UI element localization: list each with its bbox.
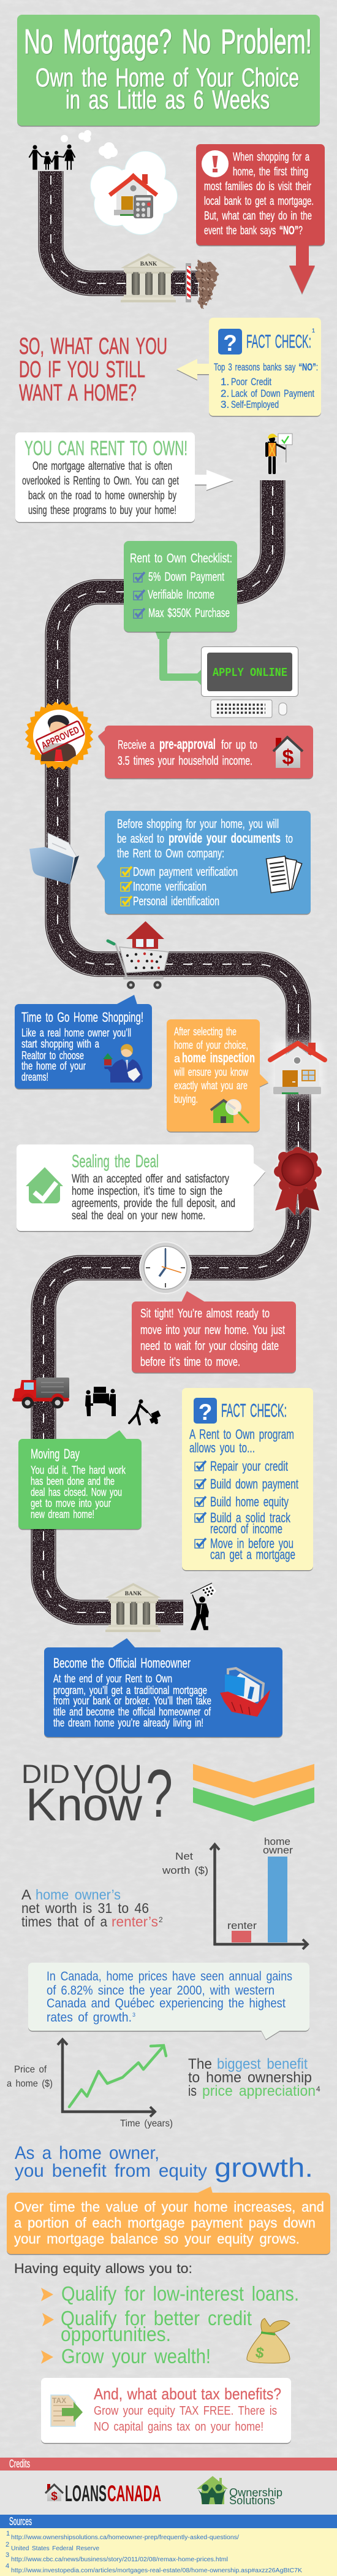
icon: house with dollar [273, 737, 303, 769]
net worth comparison text: home owner’s [36, 1887, 121, 1903]
icon: bank: BANK [140, 261, 157, 267]
text [118, 736, 257, 768]
reasons list: 2. [221, 388, 229, 399]
text block [204, 151, 314, 237]
reasons list: Poor Credit [231, 376, 271, 388]
checklist items: 5% Down Payment [148, 570, 224, 584]
line chart: price of a home over time: Price of [14, 2064, 47, 2075]
benefits list: Build down payment [210, 1476, 298, 1492]
body text: program, you’ll get a traditional mortgage [53, 1684, 207, 1696]
text: home of your choice, [174, 1039, 248, 1051]
icon: rubble [196, 260, 218, 309]
source links: http://www.cbc.ca/news/business/story/2011/02/08/remax-home-prices.html [11, 2556, 228, 2563]
text [47, 1969, 292, 2025]
price appreciation text: price appreciation [202, 2083, 316, 2099]
benefits list: Move in before you [210, 1536, 293, 1551]
benefits list: Build home equity [210, 1494, 289, 1509]
heading: Time to Go Home Shopping! [21, 1010, 143, 1025]
text: Sit tight! You’re almost ready to [140, 1307, 270, 1321]
bar chart: net worth [162, 1836, 308, 1949]
body text: back on the road to home ownership by [28, 489, 176, 502]
icon: question mark [194, 1398, 217, 1425]
heading: And, what about tax benefits? [94, 2385, 281, 2403]
body text: NO capital gains tax on your home! [94, 2420, 263, 2434]
house [110, 173, 157, 216]
text: move into your new home. You just [140, 1324, 285, 1337]
icon: house with magnifier [211, 1100, 248, 1123]
checklist items: Max $350K Purchase [148, 607, 230, 620]
intro: allows you to... [189, 1440, 255, 1455]
text: exactly what you are [174, 1079, 248, 1092]
bar chart: net worth: renter [227, 1920, 257, 1931]
icon: realtor [103, 1044, 143, 1083]
text: the Rent to Own company: [117, 847, 224, 861]
text block: event the bank says “NO”? [204, 224, 303, 237]
body text: has been done and the [31, 1475, 115, 1487]
logo: loans canada: $ [51, 2490, 58, 2503]
icon: tax document: TAX [52, 2396, 66, 2405]
icon: house with check [26, 1167, 63, 1203]
panel: tax benefits [41, 2378, 291, 2443]
panel: sit tight [132, 1291, 296, 1373]
panel: rent to own checklist [124, 541, 237, 632]
net worth comparison text: times that of a [21, 1914, 107, 1930]
heading: Sealing the Deal [72, 1152, 159, 1171]
source links: http://www.investopedia.com/articles/mortgages-real-estate/08/home-ownership.asp#axzz26AgBtC7K [11, 2567, 302, 2574]
heading: equity growth: you benefit from equity [15, 2161, 207, 2181]
road: upper segment to bank [51, 171, 198, 283]
price appreciation text [188, 2056, 320, 2099]
text: Receive a [118, 738, 155, 752]
text: Personal identification [133, 895, 219, 908]
body text: agreements, provide the full deposit, and [72, 1197, 235, 1210]
body text: new dream home! [31, 1508, 94, 1520]
heading: Become the Official Homeowner [53, 1655, 191, 1671]
line chart: price of a home over time: Time (years) [120, 2118, 173, 2129]
price appreciation text: biggest benefit [217, 2056, 308, 2072]
checklist title: Rent to Own Checklist: [130, 551, 232, 565]
body text: get to move into your [31, 1497, 111, 1509]
benefits list: Build a solid track [210, 1510, 291, 1525]
price appreciation text: The [188, 2056, 212, 2072]
text [14, 2199, 324, 2247]
text: buying. [174, 1093, 198, 1105]
icon: approved badge: APPROVED [40, 725, 81, 751]
price appreciation text: 4 [316, 2085, 320, 2093]
body text: using these programs to buy your home! [28, 504, 176, 517]
body text: overlooked is Renting to Own. You can get [22, 475, 179, 488]
bullet three: Grow your wealth! [61, 2345, 211, 2367]
panel: time to go home shopping [15, 995, 152, 1089]
source links: http://www.ownershipsolutions.ca/homeowner-prep/frequently-asked-questions/ [11, 2534, 239, 2541]
body text: With an accepted offer and satisfactory [72, 1173, 229, 1186]
body text [21, 1027, 131, 1083]
icon: house destination [270, 1040, 325, 1097]
panel: you can rent to own [15, 432, 233, 522]
text [140, 1307, 285, 1369]
heading: what can you do: DO IF YOU STILL [19, 357, 145, 383]
icon: approved badge [25, 702, 93, 770]
icon: thought bubbles with house and calculator [61, 130, 177, 234]
calculator [134, 195, 153, 218]
body text: One mortgage alternative that is often [32, 460, 172, 473]
source links: 4 [6, 2563, 9, 2570]
icon: chevrons [193, 1764, 314, 1822]
panel: provide your documents [97, 811, 311, 914]
panel: pre-approval [98, 726, 313, 778]
text: Income verification [133, 880, 206, 894]
text: 3.5 times your household income. [118, 754, 252, 768]
body text [94, 2404, 277, 2434]
icon: computer apply online [201, 646, 298, 718]
icon: road barrier [186, 263, 191, 302]
benefits list: record of income [210, 1521, 282, 1536]
heading: what can you do: WANT A HOME? [19, 380, 137, 406]
logo: ownership solutions [197, 2476, 282, 2507]
text: will ensure you know [173, 1066, 249, 1078]
benefits list: can get a mortgage [210, 1547, 295, 1562]
heading: did you know: ? [146, 1756, 173, 1831]
heading: what can you do: SO, WHAT CAN YOU [19, 334, 167, 359]
icon: bank: BANK [125, 1591, 142, 1597]
credits section [0, 2458, 337, 2515]
panel: equity explanation [7, 2187, 330, 2254]
body text [53, 1673, 211, 1729]
body text: Grow your equity TAX FREE. There is [94, 2404, 277, 2418]
subheading: having equity: Having equity allows you to: [14, 2261, 192, 2276]
logo: loans canada: LOANS [65, 2481, 107, 2506]
text: home inspection [182, 1050, 255, 1065]
text: provide your documents [168, 830, 281, 846]
intro: A Rent to Own program [189, 1427, 294, 1442]
text: of 6.82% since the year 2000, with western [47, 1984, 275, 1998]
heading: did you know: Know [26, 1779, 143, 1830]
icon: question mark: ? [223, 331, 237, 356]
panel: fact check reasons [176, 318, 321, 416]
panel: when shopping for a home [196, 144, 325, 294]
fact check heading: 1 [312, 328, 315, 334]
panel: fact check rent to own benefits [182, 1388, 313, 1570]
text [173, 1025, 255, 1105]
icon: person with hand truck [129, 1400, 161, 1424]
body text: Realtor to choose [21, 1049, 84, 1062]
body text [22, 460, 179, 517]
credits section: Credits [9, 2458, 30, 2470]
icon: movers carrying boxes [85, 1387, 116, 1416]
body text: seal the deal on your new home. [72, 1209, 205, 1222]
body text: the dream home you’re already living in! [53, 1717, 203, 1729]
text: for up to [221, 738, 257, 752]
heading: equity growth: growth. [214, 2153, 313, 2183]
panel: canada home prices callout [28, 1963, 309, 2039]
equity benefit list [41, 2282, 299, 2367]
icon: money bag [247, 2318, 290, 2363]
heading: what can you do [19, 334, 167, 406]
body text: start shopping with a [21, 1038, 100, 1050]
text: your mortgage balance so your equity grows. [14, 2231, 300, 2247]
text: be asked to [117, 832, 164, 846]
line chart: price of a home over time: a home ($) [7, 2079, 53, 2089]
reasons list: 1. [221, 376, 229, 388]
bar chart: net worth: home [264, 1836, 290, 1847]
source links: United States Federal Reserve [11, 2545, 99, 2552]
icon: house in basket [220, 1668, 270, 1717]
bar chart: net worth: worth ($) [162, 1865, 208, 1876]
panel: moving day [18, 1430, 142, 1529]
icon: document folder [29, 833, 79, 884]
icon: question mark [218, 329, 242, 356]
source links: 3 [6, 2551, 9, 2559]
heading: Moving Day [31, 1446, 80, 1462]
heading: did you know [21, 1756, 173, 1831]
heading: did you know: DID [21, 1760, 70, 1789]
body text: the home of your [21, 1060, 86, 1072]
text: In Canada, home prices have seen annual gains [47, 1969, 292, 1984]
icon: person waving checkered flag [191, 1583, 216, 1630]
body text: title and become the official homeowner of [53, 1706, 211, 1718]
benefits list: Repair your credit [210, 1459, 288, 1474]
benefits list [195, 1459, 298, 1562]
source links [6, 2530, 302, 2574]
bullet two: opportunities. [61, 2323, 171, 2345]
connector: checklist to computer [155, 629, 201, 685]
text: to [286, 832, 293, 846]
fact check heading [246, 328, 315, 352]
reasons list [214, 361, 318, 410]
net worth comparison text: renter’s [112, 1914, 158, 1930]
icon: wax seal with ribbon [274, 1147, 322, 1216]
body text: from your bank or broker. You’ll then take [53, 1695, 211, 1707]
line chart: price of a home over time [7, 2039, 173, 2129]
title panel [17, 15, 320, 126]
logo: ownership solutions: Ownership [229, 2486, 282, 2499]
icon: family [29, 145, 75, 169]
text: Over time the value of your home increases, and [14, 2199, 324, 2215]
icon: money bag: $ [254, 2344, 265, 2362]
road: main winding segment [44, 480, 298, 1612]
body text: home inspection, it’s time to sign the [72, 1185, 222, 1198]
logo: loans canada: CANADA [107, 2481, 161, 2506]
checklist items: Verifiable Income [148, 588, 214, 602]
heading: equity growth: As a home owner, [15, 2143, 159, 2163]
sources section: Sources [9, 2515, 32, 2528]
checklist items [134, 570, 230, 620]
body text: You did it. The hard work [31, 1464, 126, 1476]
logo: loans canada [45, 2481, 161, 2506]
icon: road worker with sign [265, 434, 292, 474]
icon: question mark: ? [199, 1400, 212, 1425]
bullet two [42, 2307, 252, 2345]
text: before it’s time to move. [140, 1355, 240, 1369]
text: 3 [132, 2012, 135, 2018]
body text [31, 1464, 126, 1520]
body text: dreams! [21, 1071, 48, 1083]
body text: At the end of your Rent to Own [53, 1673, 172, 1685]
reasons list: 3. [221, 399, 229, 410]
logo: ownership solutions: Solutions [229, 2494, 275, 2507]
icon: papers [267, 856, 302, 893]
bar chart: net worth: Net [175, 1850, 193, 1862]
reasons list: Self-Employed [231, 399, 279, 410]
heading: did you know: YOU [73, 1757, 142, 1803]
icon: house with dollar: $ [282, 746, 294, 769]
icon: tax document [51, 2395, 83, 2426]
price appreciation text: is [188, 2083, 197, 2099]
heading: equity growth [15, 2143, 313, 2183]
panel: become the official homeowner [44, 1638, 282, 1737]
body text: deal has closed. Now you [31, 1486, 122, 1498]
net worth comparison text: net worth is 31 to 46 [21, 1900, 149, 1916]
bullet one: Qualify for low-interest loans. [61, 2282, 299, 2305]
text: a portion of each mortgage payment pays down [14, 2215, 316, 2231]
text: need to wait for your closing date [140, 1340, 279, 1353]
icon: bank [121, 253, 176, 302]
intro [189, 1427, 294, 1455]
text: Down payment verification [133, 865, 238, 879]
text: a [174, 1052, 181, 1065]
panel: sealing the deal [17, 1144, 265, 1231]
net worth comparison text [21, 1887, 163, 1930]
body text: Like a real home owner you’ll [21, 1027, 131, 1039]
text: pre-approval [159, 736, 216, 752]
reasons list: Top 3 reasons banks say “NO”: [214, 361, 318, 373]
bar chart: net worth: owner [263, 1844, 293, 1856]
net worth comparison text: A [21, 1887, 32, 1903]
icon: computer apply online: APPLY ONLINE [213, 666, 287, 680]
text: rates of growth. [47, 2011, 132, 2025]
source links: 2 [6, 2541, 9, 2548]
panel: home inspection [167, 1019, 268, 1132]
body text [72, 1173, 235, 1222]
source links: 1 [6, 2530, 10, 2537]
net worth comparison text: 2 [159, 1915, 163, 1924]
icon: shopping cart with house [108, 921, 168, 989]
text [117, 818, 293, 908]
bullet two: Qualify for better credit [61, 2307, 252, 2329]
icon: moving truck [12, 1378, 69, 1408]
icon: exclamation [202, 150, 229, 177]
heading: YOU CAN RENT TO OWN! [25, 437, 187, 459]
icon: clock [140, 1242, 191, 1294]
text: Canada and Québec experiencing the highest [47, 1996, 286, 2011]
icon: bank [105, 1583, 161, 1632]
text: After selecting the [174, 1025, 237, 1038]
sources section [0, 2515, 337, 2576]
price appreciation text: to home ownership [188, 2069, 312, 2086]
